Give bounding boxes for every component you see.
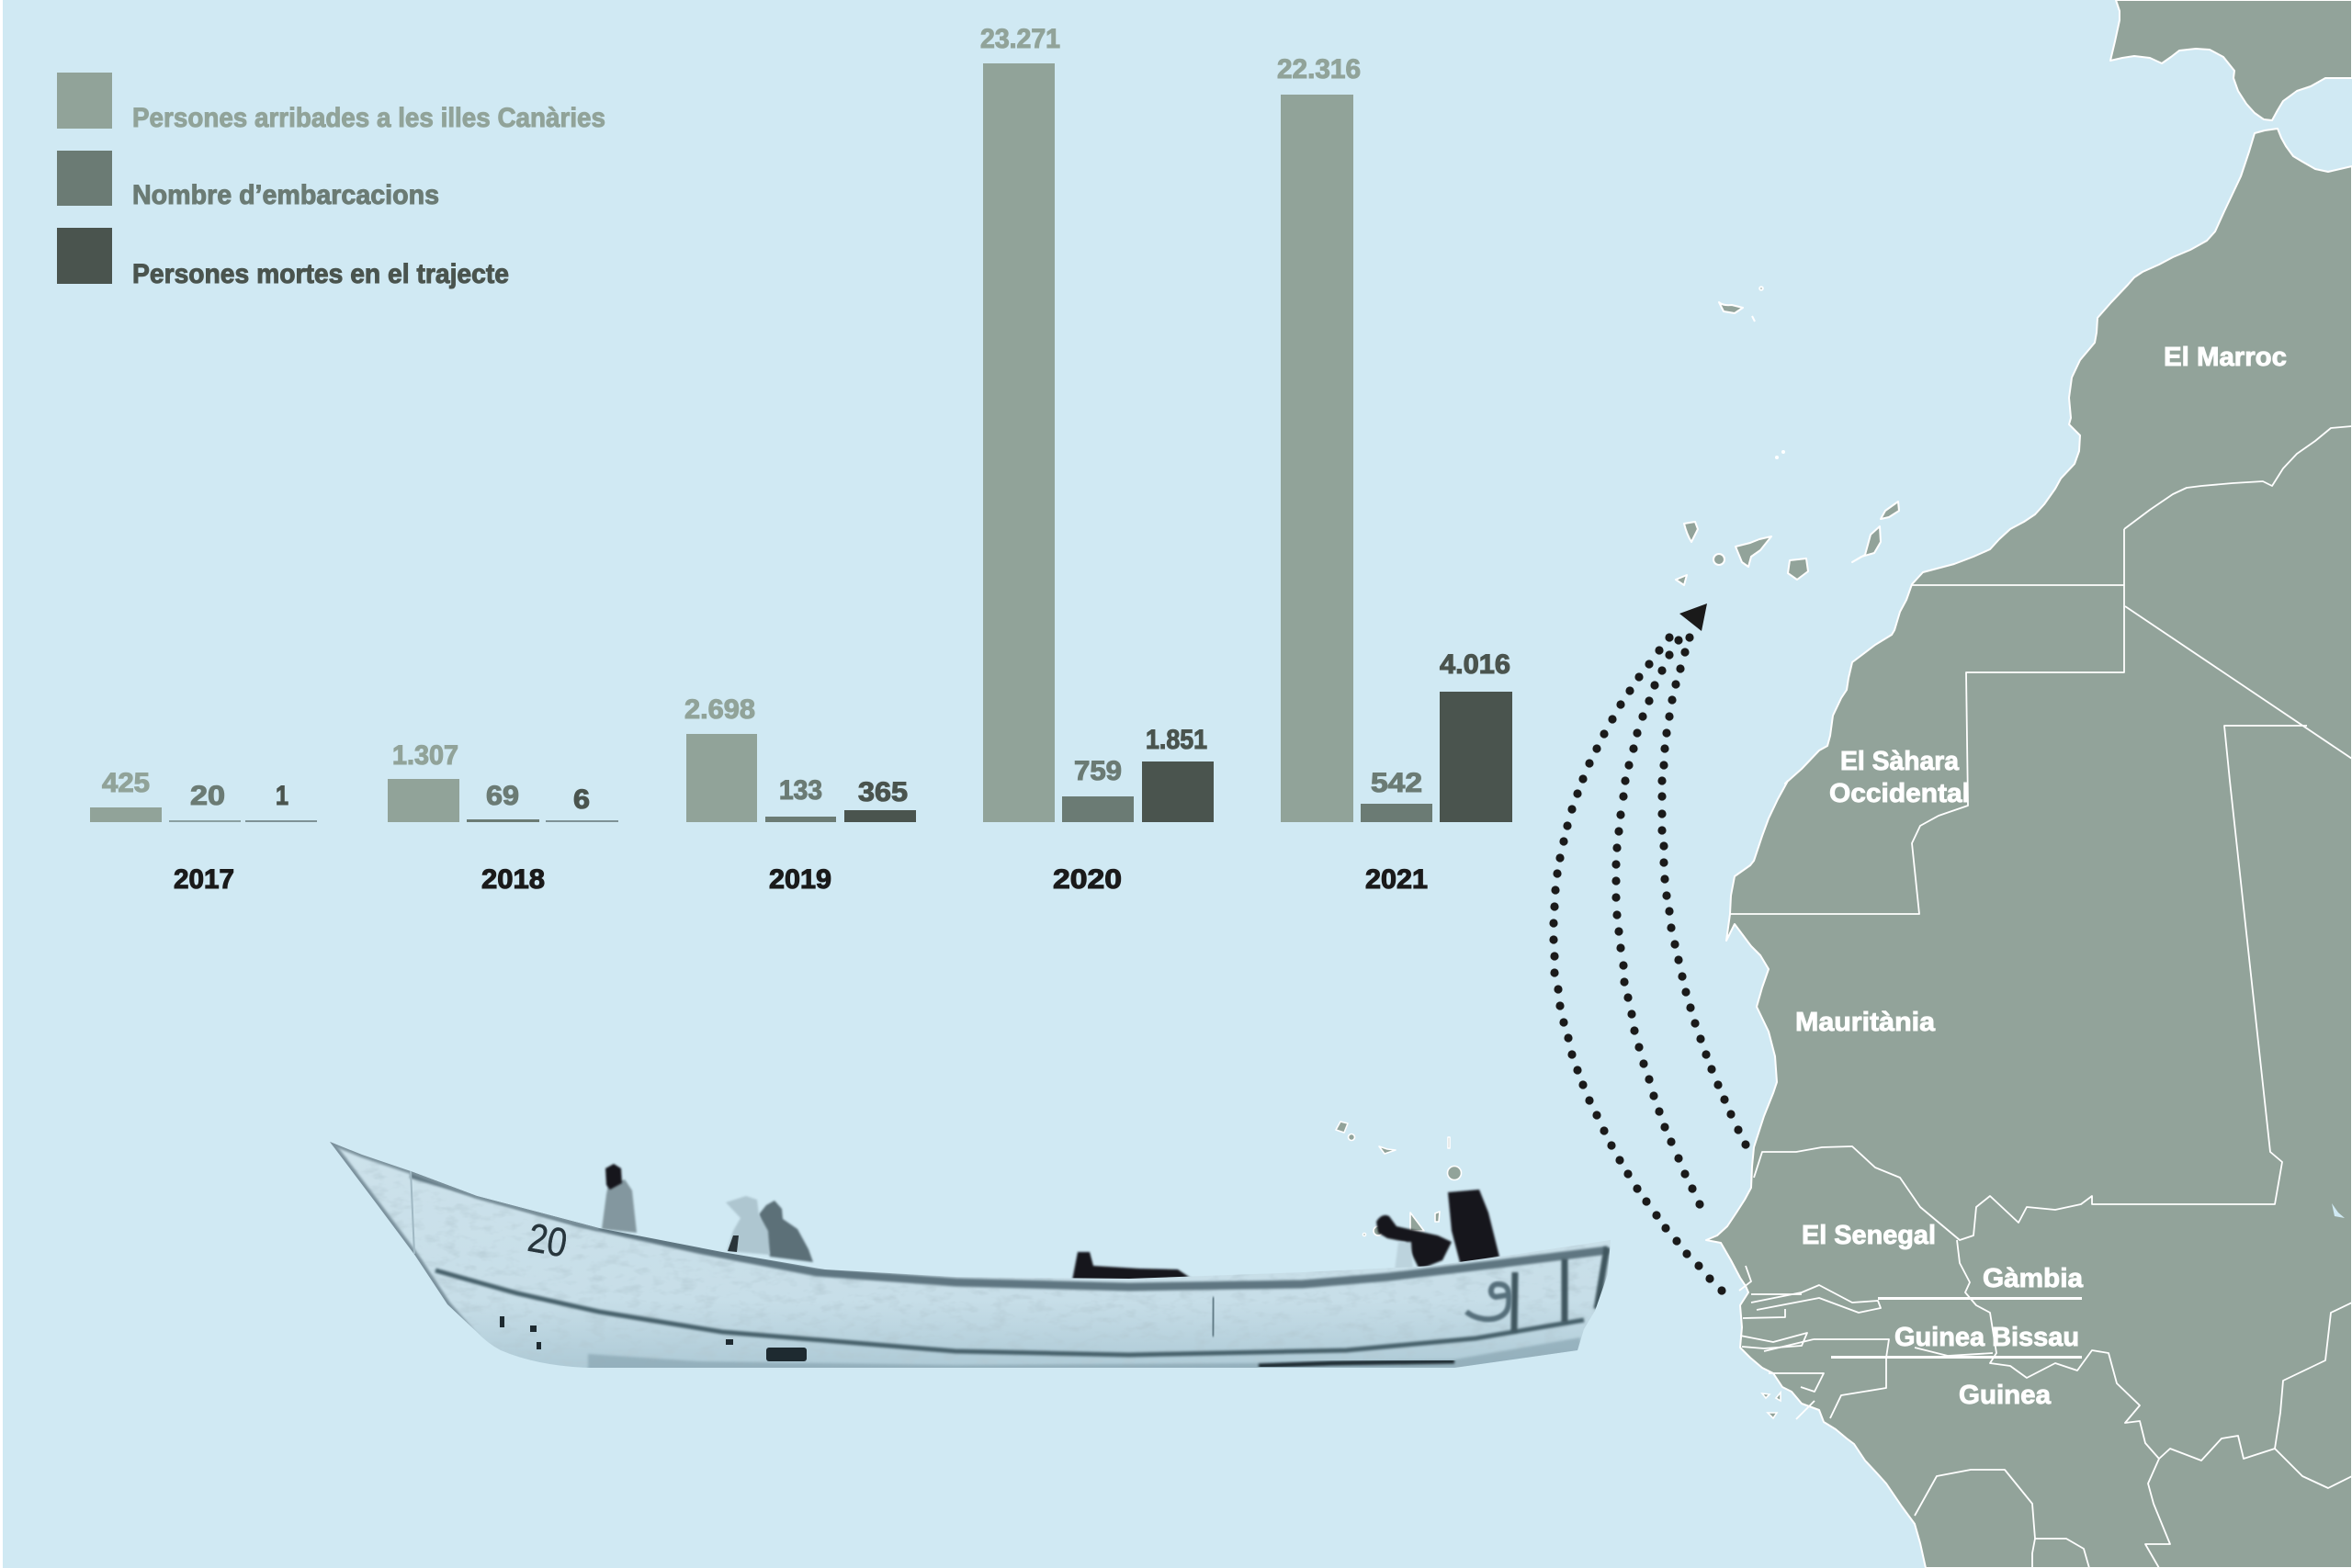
group 2018: 6 [573,784,590,815]
map of north-west Africa [1706,0,2352,1568]
Canary Islands and Madeira [1676,287,1899,585]
boat with people [322,1134,1617,1373]
group 2020: 2020 [1053,864,1122,895]
passengers [602,1164,1499,1280]
Bijagos islands [1762,1393,1781,1418]
group 2020 [980,24,1214,895]
map country labels [1795,343,2287,1410]
hull mark [1466,1284,1509,1319]
arrow head [1679,604,1707,631]
hull marks [500,1316,807,1361]
group 2021: 542 [1371,768,1422,798]
hull number: 20 [525,1215,571,1266]
group 2021 [1277,54,1512,895]
group 2018: 1.307 [392,740,458,771]
label: El Sàhara Occidental [1829,747,1970,808]
group 2021: 2021 [1365,864,1428,895]
group 2017: 1 [276,781,288,811]
legend [57,73,605,289]
country borders [1730,426,2352,1568]
group 2019: 365 [858,777,908,807]
group 2017 [90,768,317,895]
bar chart [90,24,1512,895]
migration routes: dotted arrows [1549,604,1750,1295]
group 2017: 425 [102,768,150,798]
land: Iberia [2110,0,2352,120]
group 2019: 2019 [769,864,831,895]
label: Guinea Bissau: Guinea Bissau [1894,1323,2079,1352]
group 2018: 69 [486,781,519,811]
label: El Sàhara Occidental: El Sàhara [1840,747,1960,776]
Cape Verde islands [1336,1122,1461,1236]
lake [2332,1203,2345,1218]
label: El Marroc: El Marroc [2164,343,2287,372]
group 2021: 4.016 [1440,649,1510,680]
group 2019 [684,694,916,895]
legend item: deaths [57,228,509,289]
group 2017: 2017 [174,864,234,895]
hull [330,1142,1611,1368]
land: Africa [1706,129,2352,1568]
hull texture [322,1134,1617,1373]
group 2019: 2.698 [684,694,755,725]
legend item: arrivals [57,73,605,133]
label underline: Gàmbia [1878,1297,2082,1300]
label: Guinea: Guinea [1959,1381,2052,1410]
label underline: Guinea Bissau [1831,1356,2082,1359]
group 2018 [388,740,618,895]
label: Mauritània: Mauritània [1795,1008,1936,1037]
group 2020: 759 [1074,756,1122,786]
label: El Sàhara Occidental: Occidental [1829,779,1970,808]
label: Gàmbia: Gàmbia [1983,1264,2084,1293]
group 2018: 2018 [481,864,545,895]
group 2017: 20 [190,781,225,811]
route from Senegal north [1611,636,1704,1209]
route from Mauritània [1657,633,1750,1149]
legend item: boats: Nombre d’embarcacions [132,180,439,210]
group 2019: 133 [779,775,822,806]
legend item: deaths: Persones mortes en el trajecte [132,259,509,289]
legend item: arrivals: Persones arribades a les illes Canàries [132,103,605,133]
group 2021: 22.316 [1277,54,1361,85]
group 2020: 23.271 [980,24,1060,54]
group 2020: 1.851 [1146,725,1207,755]
route from Senegal south [1549,633,1726,1295]
label: El Senegal: El Senegal [1802,1221,1936,1250]
legend item: boats [57,151,439,210]
